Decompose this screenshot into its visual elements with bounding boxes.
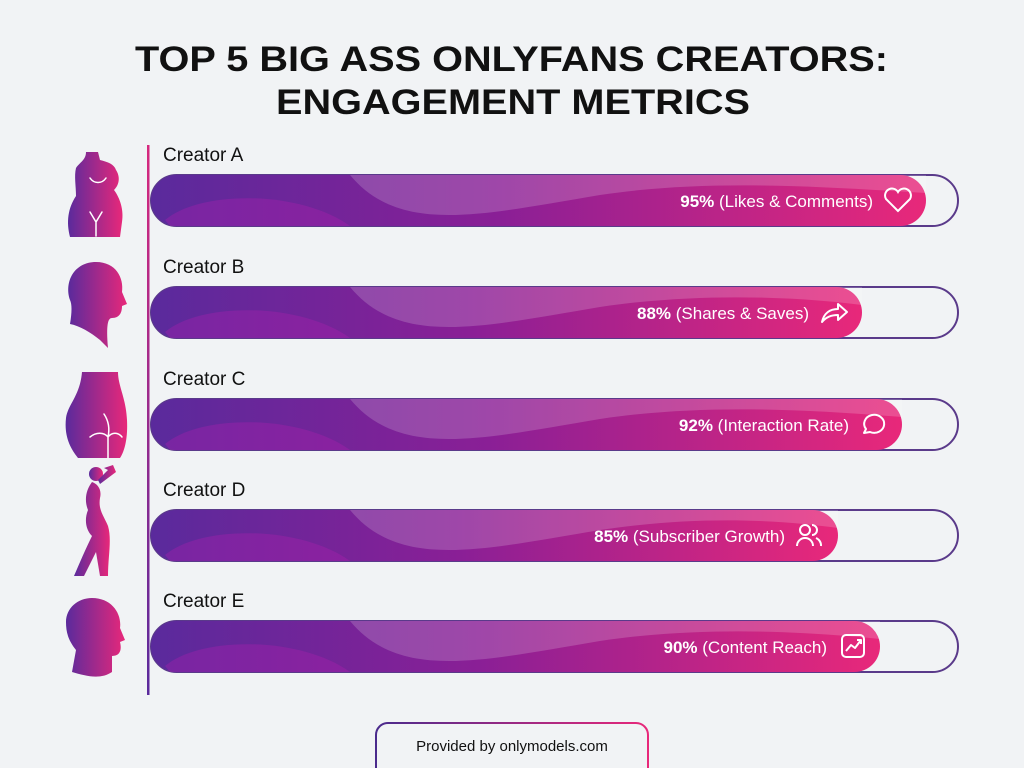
row: Creator C	[151, 369, 958, 450]
icon: buttocks (Creator C)	[66, 372, 127, 458]
row: Creator C: Creator C	[163, 369, 245, 390]
row: Creator E: 90% (Content Reach)	[664, 638, 827, 657]
icon: torso (Creator A)	[68, 152, 123, 237]
row: Creator B	[151, 257, 958, 338]
row: Creator D	[151, 480, 958, 561]
row: Creator C: 92% (Interaction Rate)	[679, 416, 849, 435]
row: Creator D: Creator D	[163, 480, 245, 501]
row: Creator E: Creator E	[163, 591, 244, 612]
footer: provider credit: Provided by onlymodels.com	[416, 738, 608, 755]
icon: head profile (Creator B)	[68, 262, 127, 348]
icon: chat bubble	[864, 415, 884, 433]
icon: posing figure (Creator D)	[74, 465, 116, 576]
row: Creator A: 95% (Likes & Comments)	[680, 192, 873, 211]
icon: heart	[885, 189, 911, 211]
row: Creator D: 85% (Subscriber Growth)	[594, 527, 785, 546]
row: Creator B: 88% (Shares & Saves)	[637, 304, 809, 323]
row: Creator E	[151, 591, 958, 672]
icon: share arrow	[822, 304, 847, 322]
icon: users	[797, 525, 821, 546]
row: Creator B: Creator B	[163, 257, 244, 278]
footer: provider credit	[376, 723, 648, 768]
title: ENGAGEMENT METRICS	[276, 83, 750, 122]
title: TOP 5 BIG ASS ONLYFANS CREATORS:	[135, 40, 888, 79]
icon: head profile (Creator E)	[66, 598, 125, 677]
row: Creator A	[151, 145, 958, 226]
title	[135, 40, 888, 122]
row: Creator A: Creator A	[163, 145, 244, 166]
vertical axis line	[147, 145, 150, 695]
icon: growth chart	[842, 635, 864, 657]
